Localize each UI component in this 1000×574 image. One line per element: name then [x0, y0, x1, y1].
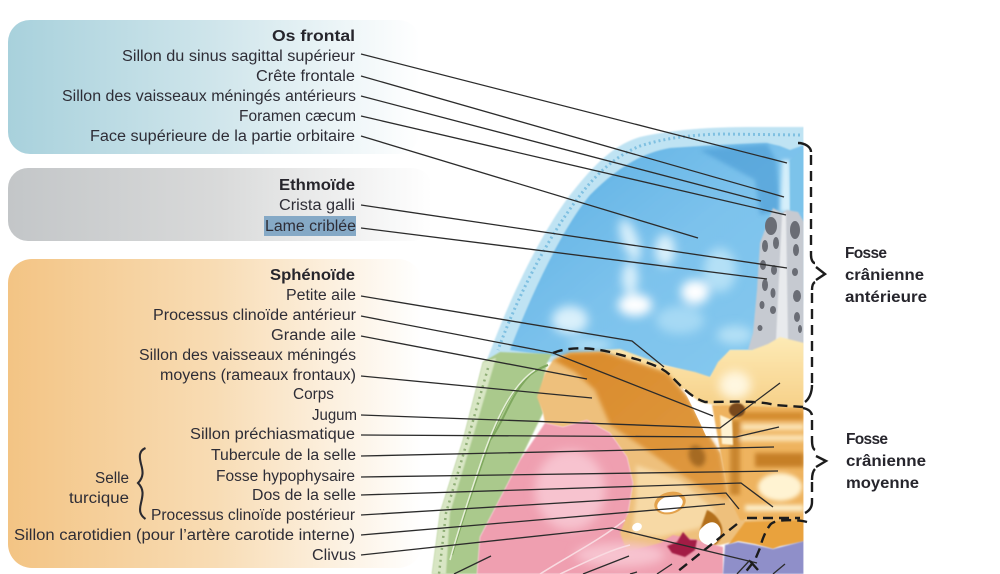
parietal dots: [439, 368, 488, 574]
label: fosse crânienne antérieure: Fosse: [845, 245, 887, 262]
foramen small: [632, 522, 642, 532]
icon: curly brace: [138, 448, 146, 519]
label: fosse crânienne antérieure: antérieure: [845, 289, 927, 306]
label: tubercule de la selle: Tubercule de la selle: [211, 447, 356, 464]
carotid dark maroon: [667, 532, 697, 557]
label: fosse crânienne antérieure: crânienne: [845, 267, 924, 284]
purple occipital: [723, 541, 804, 574]
greater wing shaded: [553, 352, 728, 500]
label: fosse hypophysaire: Fosse hypophysaire: [216, 468, 355, 485]
label: processus clinoïde antérieur: Processus clinoïde antérieur: [153, 307, 356, 324]
label: jugum: Jugum: [312, 407, 357, 424]
label: corps: Corps: [293, 386, 334, 403]
sella bands: [730, 412, 805, 511]
label: selle turcique: turcique: [69, 490, 129, 507]
optic canal white slit: [683, 388, 712, 436]
pale highlight on planum: [719, 371, 751, 399]
jugum pale: [720, 415, 733, 445]
label: processus clinoïde postérieur: Processus clinoïde postérieur: [151, 507, 355, 524]
label: petite aile: Petite aile: [286, 287, 356, 304]
parietal vessels: [452, 365, 548, 555]
clinoid notch orange at bottom: [728, 520, 804, 549]
frontal crest darker region: [700, 144, 781, 215]
label: grande aile: Grande aile: [271, 327, 356, 344]
ethmoid: [748, 208, 804, 350]
ethmoid perforations: [758, 217, 802, 333]
label: selle turcique: Selle: [95, 470, 129, 487]
foramen ovale shade: [686, 444, 708, 468]
frontal bone diploe: [486, 127, 804, 362]
panel: sphénoïde: [8, 259, 422, 568]
label: selle turcique: [69, 470, 129, 507]
dashed boundary: anterior-middle fossa: [553, 348, 803, 407]
heading: ethmoïde: Ethmoïde: [279, 177, 355, 194]
label: sillon carotidien: Sillon carotidien (pour l’artère carotide interne): [14, 527, 355, 544]
label: foramen cæcum: Foramen cæcum: [239, 108, 356, 125]
frontal bone orbital surface: [510, 143, 804, 378]
parietal green: [432, 352, 552, 574]
label: sillon des vaisseaux méningés moyens: [139, 347, 356, 384]
label: sillon préchiasmatique: Sillon préchiasmatique: [190, 426, 355, 443]
panel: os frontal: [8, 20, 420, 154]
sphenoid greater wing base: [537, 352, 804, 552]
temporal pink: [477, 420, 723, 574]
dashed boundary: middle-posterior fossa: [677, 518, 807, 574]
label: crista galli: Crista galli: [279, 197, 355, 214]
diploe dots: [498, 134, 800, 350]
ethmoid central strip: [776, 212, 788, 340]
label: sillon des vaisseaux méningés moyens: moyens (rameaux frontaux): [160, 367, 356, 384]
foramen lacerum: [699, 522, 721, 545]
label: fosse crânienne moyenne: Fosse: [846, 431, 888, 448]
foramen lacerum shade: [700, 510, 723, 545]
parietal diploe: [432, 358, 496, 574]
marker: bar at clivus leader: [750, 561, 758, 570]
pink petrous ridges: [540, 520, 630, 574]
heading: os frontal: Os frontal: [272, 28, 355, 45]
foramen white: [657, 496, 683, 512]
heading: sphénoïde: Sphénoïde: [270, 267, 355, 284]
label: fosse crânienne moyenne: crânienne: [846, 453, 926, 470]
sphenoid yellow lesser wing and planum: [603, 337, 804, 412]
label: dos de la selle: Dos de la selle: [252, 487, 356, 504]
sinus region: [790, 148, 804, 212]
bracket: middle fossa: [803, 408, 826, 513]
frontal highlights: [552, 217, 753, 351]
illustration: skull base: [432, 127, 805, 574]
leader lines: [361, 54, 787, 574]
label: crête frontale: Crête frontale: [256, 68, 355, 85]
label: face supérieure de la partie orbitaire: Face supérieure de la partie orbitaire: [90, 128, 355, 145]
dark pits: [729, 403, 745, 417]
label: sillon des vaisseaux méningés moyens: Sillon des vaisseaux méningés: [139, 347, 356, 364]
bracket: anterior fossa: [798, 143, 825, 402]
label: lame criblée with highlight: Lame criblée: [265, 218, 356, 235]
frontal crest pale strip: [780, 160, 792, 212]
label: fosse crânienne antérieure: [845, 245, 927, 306]
label: fosse crânienne moyenne: moyenne: [846, 475, 919, 492]
pink highlights: [535, 450, 665, 567]
foramen rotundum: [654, 492, 686, 514]
sella central body: [712, 405, 804, 520]
label: clivus: Clivus: [312, 547, 356, 564]
panel: ethmoïde: [8, 168, 432, 241]
label: sillon du sinus sagittal supérieur: Sillon du sinus sagittal supérieur: [122, 48, 355, 65]
label: sillon des vaisseaux méningés antérieurs: Sillon des vaisseaux méningés antérieurs: [62, 88, 356, 105]
label: fosse crânienne moyenne: [846, 431, 926, 492]
greater wing pale area: [632, 465, 715, 537]
